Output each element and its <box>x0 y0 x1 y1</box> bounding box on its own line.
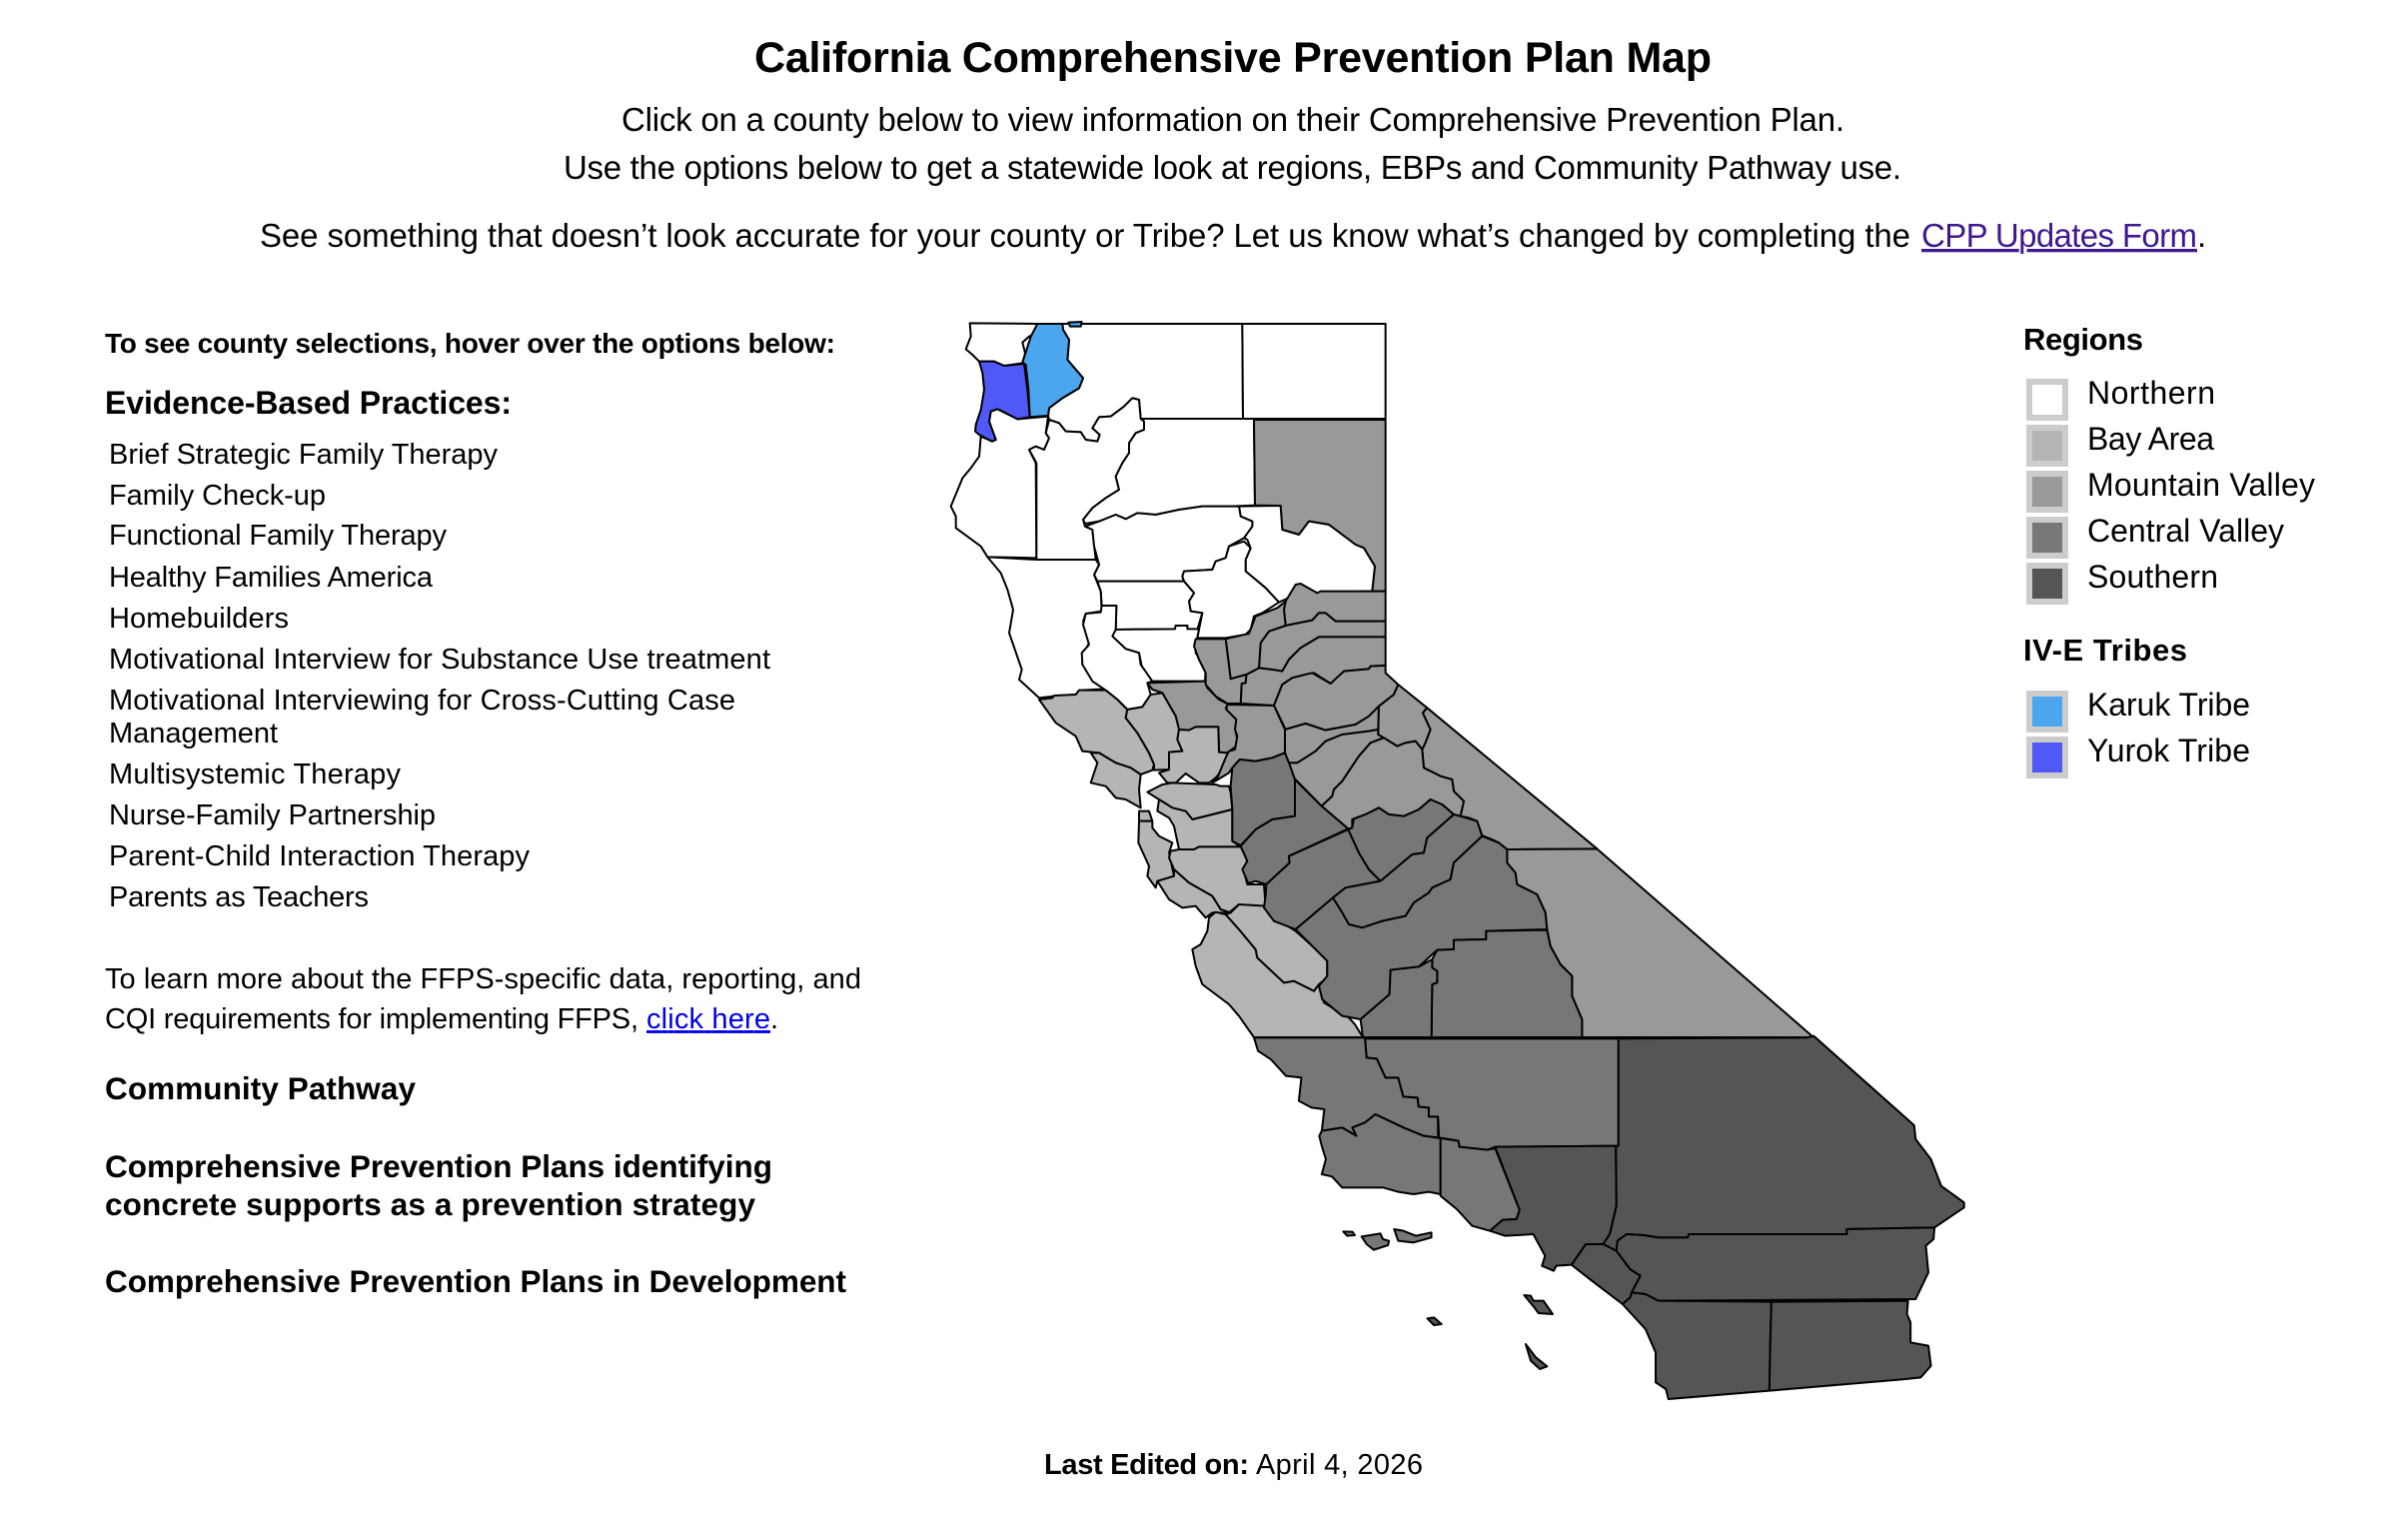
county: Merced <box>1264 829 1381 929</box>
list: evidence-based practices: Multisystemic Therapy <box>109 759 402 790</box>
legend: IV-E tribes <box>2023 633 2250 775</box>
island: Santa Barbara <box>1427 1317 1442 1325</box>
list: evidence-based practices: Homebuilders <box>109 603 289 635</box>
county: Fresno <box>1296 836 1547 1019</box>
county: Yuba <box>1226 602 1286 679</box>
county: San Bernardino <box>1603 1036 1964 1251</box>
county: Yolo <box>1147 682 1238 753</box>
legend item: Mountain Valley: Mountain Valley <box>2087 467 2315 503</box>
island: San Clemente <box>1526 1344 1547 1369</box>
county: Tehama <box>1085 507 1252 582</box>
county: Sierra <box>1284 584 1386 626</box>
county: Humboldt south <box>951 409 1049 558</box>
list: evidence-based practices: Parents as Teachers <box>109 881 369 913</box>
channel island: Santa Cruz <box>1394 1229 1432 1242</box>
legend item: Northern <box>2029 375 2215 418</box>
county: Orange <box>1572 1244 1641 1304</box>
legend item: Mountain Valley <box>2029 467 2315 510</box>
Yurok Tribe area <box>975 362 1030 442</box>
legend item: Central Valley: Central Valley <box>2087 513 2284 549</box>
county: Mono <box>1422 708 1597 849</box>
county: Santa Clara <box>1169 846 1266 912</box>
list: evidence-based practices: Functional Family Therapy <box>109 520 448 552</box>
county: San Joaquin <box>1231 753 1295 845</box>
county: Siskiyou <box>1048 324 1243 442</box>
county: Madera <box>1333 814 1482 927</box>
county: Monterey and San Luis Obispo <box>1192 912 1363 1037</box>
county: Riverside <box>1617 1227 1934 1301</box>
county: Lake <box>1082 606 1152 710</box>
county: Plumas <box>1239 506 1375 603</box>
county: Lassen <box>1254 420 1386 592</box>
list: evidence-based practices: Motivational Interview for Substance Use treatment <box>109 644 770 676</box>
county: Del Norte <box>966 323 1037 366</box>
option: concrete supports: Comprehensive Prevention Plans identifying <box>105 1148 772 1184</box>
county: Alameda <box>1157 799 1241 849</box>
FFPS requirements note with link: click here <box>646 1003 770 1035</box>
county: San Bernardino west <box>1490 1146 1617 1271</box>
county: Tuolumne <box>1322 738 1464 828</box>
island: Santa Catalina <box>1524 1295 1553 1314</box>
page header <box>260 34 2206 254</box>
Karuk Tribe area <box>1022 324 1083 417</box>
intro line 2: Use the options below to get a statewide look at regions, EBPs and Community Pathway use. <box>564 149 1901 186</box>
county: Napa <box>1126 693 1182 770</box>
panel: left options <box>105 328 861 1299</box>
county: San Francisco <box>1139 811 1152 821</box>
county: Santa Cruz <box>1157 869 1231 917</box>
Karuk Tribe small area <box>1068 322 1082 327</box>
county: Contra Costa <box>1147 782 1232 819</box>
FFPS requirements note with link: CQI requirements for implementing FFPS, <box>105 1003 638 1035</box>
list: evidence-based practices: Nurse-Family Partnership <box>109 799 436 831</box>
county: Glenn <box>1097 582 1202 630</box>
list: evidence-based practices: Motivational Interviewing for Cross-Cutting Case <box>109 685 735 717</box>
county: El Dorado <box>1274 666 1398 731</box>
list: evidence-based practices: Parent-Child Interaction Therapy <box>109 840 530 872</box>
county: Kings <box>1361 959 1437 1037</box>
northern counties <box>951 322 1386 698</box>
southern counties <box>1254 1036 1964 1399</box>
county: Sacramento <box>1212 705 1285 782</box>
FFPS requirements note with link: . <box>770 1003 778 1035</box>
county: Ventura <box>1319 1114 1441 1194</box>
county: Los Angeles <box>1441 1138 1520 1231</box>
county: Amador <box>1285 707 1379 763</box>
list: evidence-based practices: Management <box>109 718 278 750</box>
county: Placer <box>1241 637 1386 706</box>
heading: evidence-based practices: Evidence-Based Practices: <box>105 385 512 421</box>
county: Calaveras <box>1289 730 1384 806</box>
legend item: Southern: Southern <box>2087 559 2218 595</box>
county: Mendocino <box>987 557 1106 698</box>
county: Modoc <box>1242 324 1386 419</box>
county: San Diego <box>1623 1292 1772 1399</box>
county: Stanislaus <box>1241 779 1348 884</box>
county: Trinity <box>1029 398 1144 560</box>
legend item: Yurok Tribe: Yurok Tribe <box>2087 733 2250 768</box>
intro line 1: Click on a county below to view information on their Comprehensive Prevention Plan. <box>621 101 1844 138</box>
legend item: Karuk Tribe <box>2029 687 2250 730</box>
legend item: Central Valley <box>2029 513 2284 556</box>
county: San Mateo <box>1138 821 1174 887</box>
county: Inyo <box>1507 848 1813 1037</box>
heading: regions: Regions <box>2023 322 2143 357</box>
accuracy prompt with link: CPP Updates Form <box>1921 217 2197 254</box>
option: community pathway: Community Pathway <box>105 1070 416 1106</box>
option: concrete supports: concrete supports as a prevention strategy <box>105 1186 755 1222</box>
county: Solano <box>1159 727 1227 782</box>
map: California counties <box>951 322 1964 1399</box>
FFPS requirements note with link <box>105 963 861 1035</box>
county: Shasta <box>1083 419 1255 524</box>
heading: IV-E tribes: IV-E Tribes <box>2023 633 2187 668</box>
county: Butte <box>1182 542 1279 638</box>
county: San Benito <box>1226 904 1327 991</box>
bay area and valley counties <box>1039 606 1363 1037</box>
county: Sutter <box>1194 639 1246 704</box>
channel island: San Miguel <box>1343 1231 1355 1236</box>
legend item: Bay Area <box>2029 421 2214 464</box>
list: evidence-based practices <box>109 439 770 913</box>
list: evidence-based practices: Brief Strategic Family Therapy <box>109 439 498 471</box>
accuracy prompt with link: . <box>2197 217 2206 254</box>
county: Nevada <box>1259 613 1386 672</box>
county: Imperial <box>1770 1301 1931 1391</box>
option: plans in development: Comprehensive Prevention Plans in Development <box>105 1263 847 1299</box>
legend: regions <box>2023 322 2315 602</box>
county: Kern <box>1365 1038 1619 1150</box>
list: evidence-based practices: Healthy Families America <box>109 562 434 594</box>
legend item: Bay Area: Bay Area <box>2087 421 2214 457</box>
legend item: Northern: Northern <box>2087 375 2215 411</box>
option: concrete supports <box>105 1148 772 1222</box>
last edited footer: April 4, 2026 <box>1256 1449 1423 1481</box>
legend item: Karuk Tribe: Karuk Tribe <box>2087 687 2250 723</box>
county: Santa Barbara <box>1254 1037 1438 1137</box>
title: California Comprehensive Prevention Plan Map <box>754 34 1712 82</box>
list: evidence-based practices: Family Check-up <box>109 480 326 512</box>
legend item: Yurok Tribe <box>2029 733 2250 775</box>
legend item: Southern <box>2029 559 2218 602</box>
sierra and central valley counties <box>1194 584 1813 1037</box>
accuracy prompt with link: See something that doesn’t look accurate for your county or Tribe? Let us know what’s changed by completing the <box>260 217 1910 254</box>
hover instruction: To see county selections, hover over the options below: <box>105 328 835 359</box>
county: Colusa <box>1112 626 1206 682</box>
county: Tulare <box>1432 930 1582 1037</box>
channel island: Santa Rosa <box>1362 1233 1389 1250</box>
county: Sonoma <box>1039 691 1154 774</box>
county: Alpine <box>1378 685 1431 750</box>
county: Mariposa <box>1348 799 1454 881</box>
last edited footer: Last Edited on: <box>1044 1449 1249 1481</box>
FFPS requirements note with link: To learn more about the FFPS-specific data, reporting, and <box>105 963 861 995</box>
county: Marin <box>1091 753 1141 807</box>
last edited footer <box>1044 1449 1423 1481</box>
